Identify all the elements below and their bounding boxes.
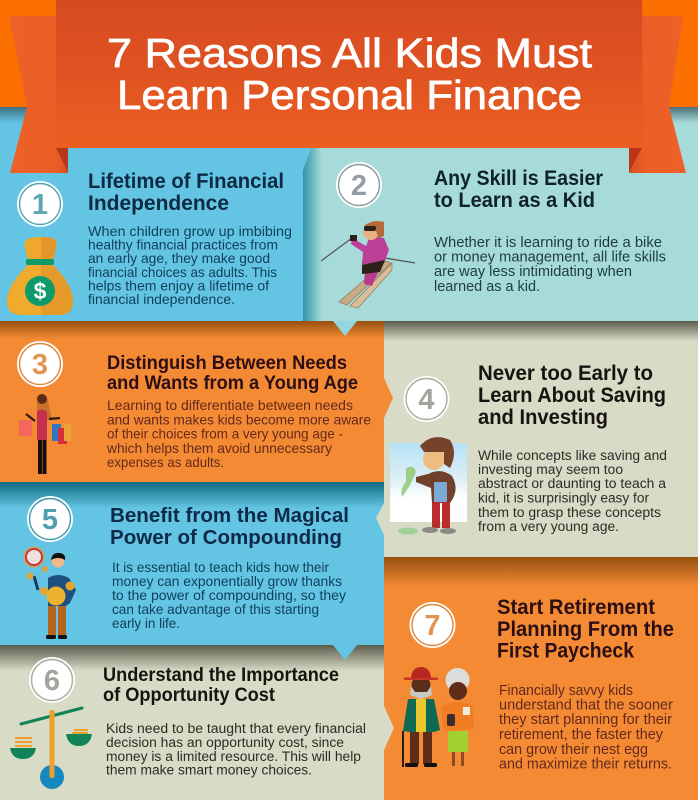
panel 2: any skill is easier [303,107,698,321]
heading 5: Power of Compounding [110,526,342,549]
heading 6: Understand the Importance [103,664,339,686]
number badge 1: 1 [32,189,48,221]
body text 4: from a very young age. [478,519,619,535]
heading 5: Benefit from the Magical [110,504,349,527]
body text 4: abstract or daunting to teach a [478,476,666,492]
body text 2: are way less intimidating when [434,264,632,280]
heading 7 [497,596,674,662]
body text 6: decision has an opportunity cost, since [106,735,344,751]
number badge 7 [410,602,456,648]
heading 7: Start Retirement [497,596,655,619]
number badge 2 [336,162,382,208]
body text 4: investing may seem too [478,462,623,478]
ribbon left tail [9,16,68,173]
heading 2: to Learn as a Kid [434,189,595,212]
body text 7 [499,683,673,772]
body text 2: learned as a kid. [434,279,540,295]
body text 5: It is essential to teach kids how their [112,559,329,575]
body text 5: to the power of compounding, so they [112,587,346,603]
heading 2: Any Skill is Easier [434,167,603,190]
body text 3: which helps them avoid unnecessary [106,440,332,456]
heading 1 [88,170,284,215]
body text 7: and maximize their returns. [499,756,672,772]
heading 3: Distinguish Between Needs [107,352,347,374]
heading 4 [478,362,666,429]
icon: skier [321,221,415,308]
body text 1: When children grow up imbibing [88,224,292,239]
top orange band [0,0,698,107]
body text 5: early in life. [112,615,180,631]
number badge 6 [29,657,75,703]
heading 1: Lifetime of Financial [88,170,284,193]
ribbon fold left [56,148,68,172]
number badge 7: 7 [424,610,441,642]
heading 5 [110,504,349,549]
number badge 5: 5 [42,504,58,536]
ribbon right tail [629,16,686,173]
icon: money bag: $ [34,278,47,304]
heading 7: First Paycheck [497,640,634,662]
panel 7: retirement planning [384,557,698,800]
heading 7: Planning From the [497,618,674,641]
panel 5: magical power of compounding [0,482,384,645]
body text 6: them make smart money choices. [106,762,312,778]
panel 6: opportunity cost [0,645,384,800]
body text 3: of their choices from a very young age - [107,426,343,442]
icon: boy with money plant [390,437,467,534]
heading 3: and Wants from a Young Age [107,372,358,394]
body text 1: an early age, they make good [88,251,270,266]
arrow: panel 5 to 6 [333,645,357,660]
body text 5: money can exponentially grow thanks [112,573,342,589]
body text 2: or money management, all life skills [434,250,666,266]
heading 4: and Investing [478,406,608,429]
number badge 6: 6 [44,665,60,697]
body text 4 [478,448,667,535]
number badge 2: 2 [351,170,367,202]
heading 6: of Opportunity Cost [103,684,275,706]
body text 6: Kids need to be taught that every financial [106,721,366,737]
body text 3: and wants makes kids become more aware [107,412,371,428]
heading 4: Never too Early to [478,362,653,385]
body text 5 [112,559,346,631]
heading 2 [434,167,603,212]
arrow: panel 4 to 5 [376,503,384,535]
ribbon main [56,0,642,148]
number badge 4: 4 [418,384,435,416]
body text 7: they start planning for their [499,712,672,728]
body text 7: Financially savvy kids [499,683,633,699]
panel 4: never too early [384,321,698,557]
heading 6 [103,664,339,706]
body text 3: Learning to differentiate between needs [107,397,353,413]
number badge 3 [17,341,63,387]
body text 1: financial choices as adults. This [88,265,277,280]
title text [107,30,593,118]
body text 4: kid, it is surprisingly easy for [478,490,649,506]
body text 5: can take advantage of this starting [112,601,319,617]
number badge 3: 3 [32,349,48,381]
heading 4: Learn About Saving [478,384,666,407]
body text 1 [88,224,292,307]
icon: elderly couple [403,667,474,767]
icon: man with clock and coins [24,546,76,639]
heading 1: Independence [88,192,229,215]
body text 3 [106,397,371,470]
arrow: panel 3 to 4 [384,378,393,418]
body text 6: money is a limited resource. This will help [106,749,361,765]
ribbon fold right [629,148,642,172]
number badge 4 [404,376,450,422]
body text 3: expenses as adults. [107,454,224,470]
icon: shopper [19,394,71,474]
icon: balance scale [10,708,92,789]
body text 2: Whether it is learning to ride a bike [434,235,662,251]
body text 1: healthy financial practices from [88,238,278,252]
arrow: panel 1 to 3 [333,321,357,336]
body text 4: While concepts like saving and [478,448,667,464]
body text 6 [106,721,366,778]
title text: 7 Reasons All Kids Must [107,30,593,76]
heading 3 [107,352,358,394]
body text 7: retirement, the faster they [499,727,664,743]
number badge 5 [27,496,73,542]
panel 1: lifetime of financial independence [0,107,311,321]
body text 2 [434,235,666,295]
body text 1: helps them enjoy a lifetime of [88,278,269,294]
body text 4: them to grasp these concepts [478,505,661,521]
title ribbon [9,0,686,173]
number badge 1 [17,181,63,227]
body text 1: financial independence. [88,292,235,307]
body text 7: understand that the sooner [499,698,673,714]
panel 3: needs and wants [0,321,384,482]
title text: Learn Personal Finance [117,72,582,118]
body text 7: can grow their nest egg [499,742,648,758]
icon: money bag [7,237,73,315]
arrow: panel 6 to 7 [384,706,394,750]
